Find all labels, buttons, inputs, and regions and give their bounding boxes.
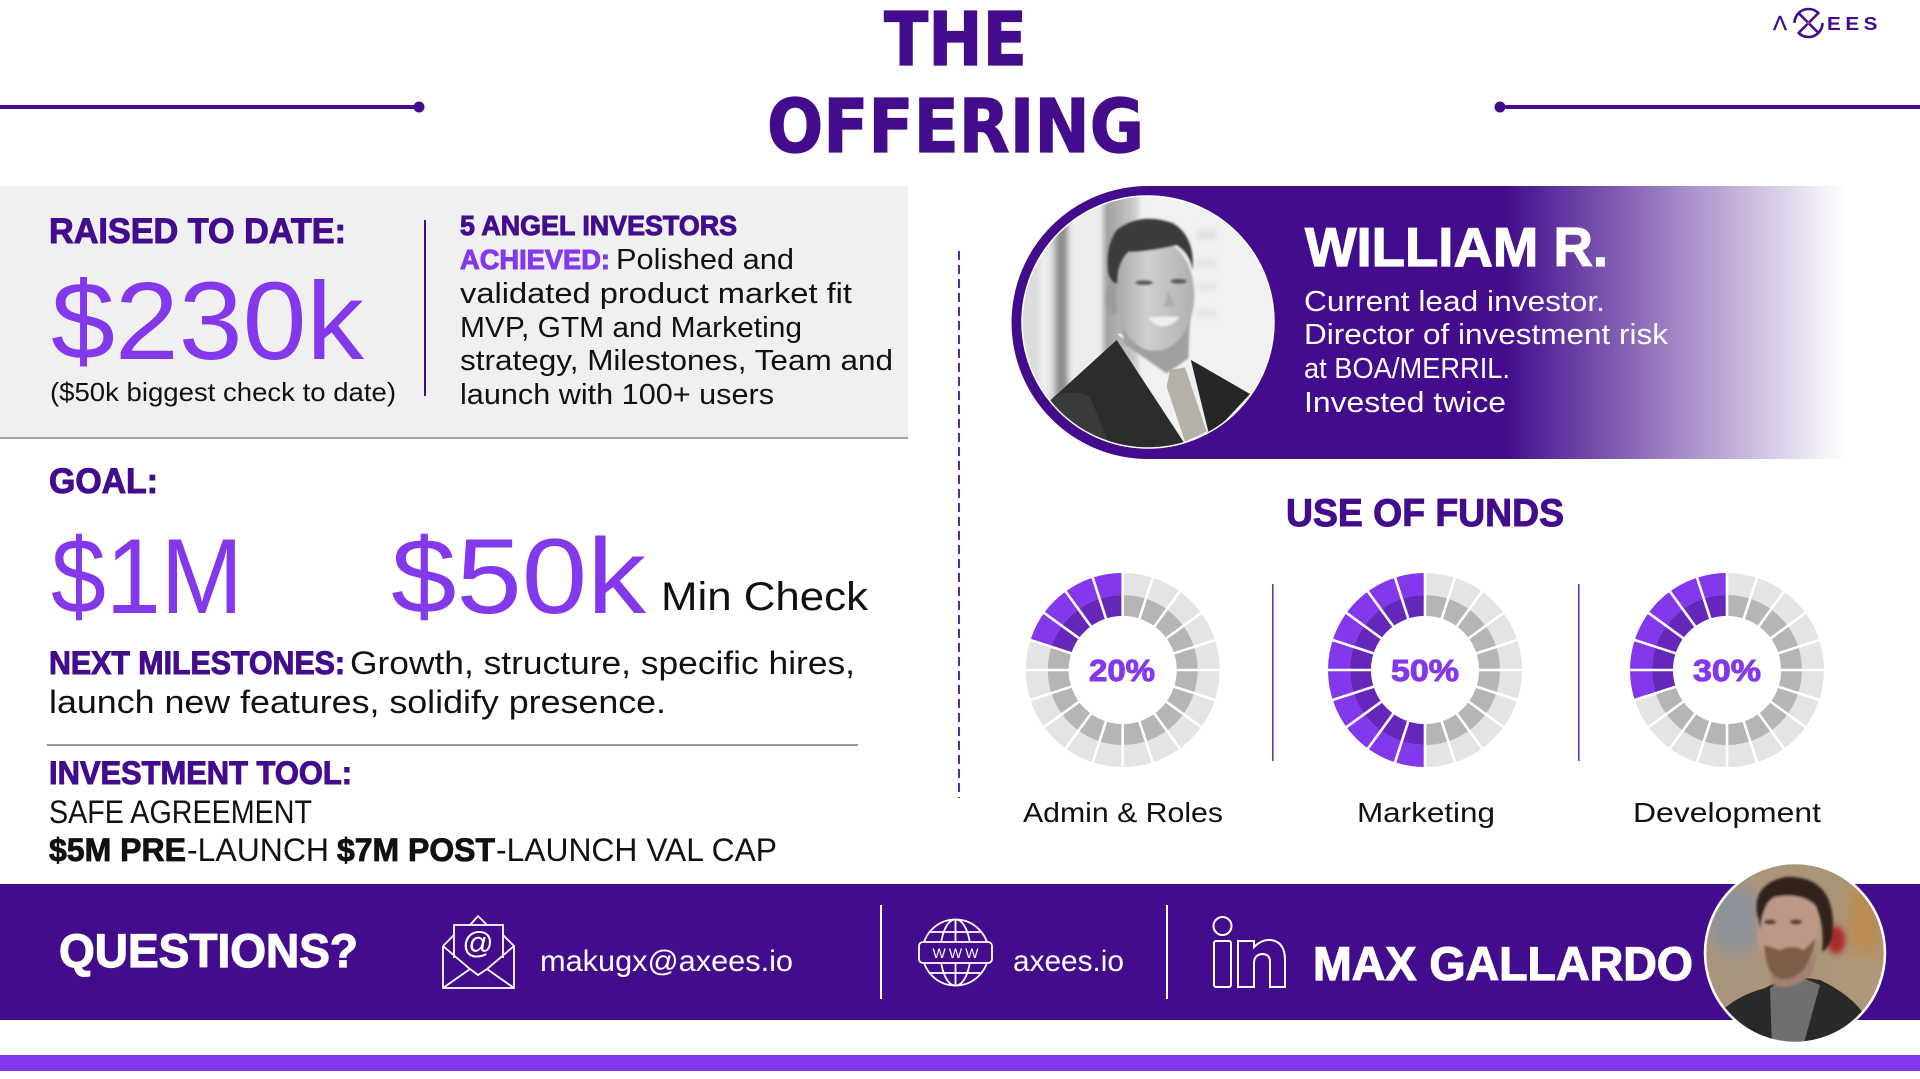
website: axees.io — [1013, 945, 1124, 978]
chart: development 30 percent — [1619, 562, 1835, 778]
text block: angel investors: ACHIEVED: — [460, 244, 610, 275]
text block: investment tool: INVESTMENT TOOL: — [49, 755, 352, 791]
title — [767, 0, 1144, 170]
title rule right — [1494, 102, 1920, 112]
chart: admin and roles 20 percent: 20% — [1089, 653, 1155, 688]
heading: questions: QUESTIONS? — [59, 924, 358, 977]
text block: next milestones — [49, 645, 855, 720]
text block: investment tool: $5M PRE — [49, 832, 186, 868]
text block: investor bio: Invested twice — [1304, 387, 1506, 419]
heading: goal: GOAL: — [49, 462, 158, 501]
minimum check label: Min Check — [661, 575, 869, 619]
photo: max portrait — [1700, 860, 1890, 1050]
text block: investor bio — [1304, 286, 1669, 419]
text block: angel investors — [460, 210, 893, 411]
label: admin and roles: Admin & Roles — [1023, 797, 1223, 828]
heading: use of funds: USE OF FUNDS — [1286, 492, 1564, 535]
text block: angel investors: 5 ANGEL INVESTORS — [460, 210, 737, 241]
panel: raised to date — [0, 186, 908, 439]
name: william r: WILLIAM R. — [1305, 216, 1608, 278]
chart: development 30 percent: 30% — [1693, 653, 1761, 688]
bottom accent bar — [0, 1055, 1920, 1071]
icon: logo x mark — [1794, 9, 1822, 37]
icon: globe: WWW — [932, 945, 979, 961]
text block: investor bio: Current lead investor. — [1304, 286, 1605, 318]
text block: investment tool: $7M POST — [337, 832, 495, 868]
label: development: Development — [1633, 797, 1821, 828]
chart: marketing 50 percent — [1325, 570, 1525, 770]
text block: investment tool: -LAUNCH — [187, 832, 329, 868]
text block: next milestones: NEXT MILESTONES: — [49, 645, 345, 681]
text block: investment tool: -LAUNCH VAL CAP — [496, 832, 777, 868]
text block: angel investors: Polished and — [616, 244, 794, 276]
photo: william portrait — [1022, 196, 1274, 448]
chart: marketing 50 percent: 50% — [1391, 653, 1459, 688]
text block: investment tool — [49, 755, 777, 868]
panel: contact footer — [0, 884, 1920, 1020]
icon: globe — [919, 919, 992, 986]
chart: admin and roles 20 percent — [1014, 562, 1231, 778]
heading: raised to date: RAISED TO DATE: — [49, 212, 346, 251]
icon: linkedin — [1214, 917, 1285, 987]
minimum check amount: $50k — [391, 516, 647, 636]
text block: angel investors: validated product market fit — [460, 278, 852, 310]
icon: email envelope — [443, 916, 514, 988]
title: OFFERING — [767, 84, 1144, 170]
logo: axees — [1773, 9, 1882, 37]
text block: angel investors: launch with 100+ users — [460, 379, 774, 411]
label: marketing: Marketing — [1357, 797, 1495, 828]
name: max gallardo: MAX GALLARDO — [1313, 937, 1693, 990]
text block: investor bio: Director of investment risk — [1304, 319, 1669, 351]
text block: next milestones: launch new features, solidify presence. — [49, 684, 666, 720]
logo: axees: Λ — [1773, 13, 1788, 35]
text block: angel investors: MVP, GTM and Marketing — [460, 312, 802, 344]
text block: next milestones: Growth, structure, specific hires, — [350, 645, 855, 681]
text block: angel investors: strategy, Milestones, Team and — [460, 345, 893, 377]
logo: axees: EES — [1827, 14, 1882, 34]
text block: investor bio: at BOA/MERRIL. — [1304, 353, 1510, 385]
icon: email envelope: @ — [462, 925, 494, 960]
panel: lead investor — [1012, 186, 1845, 470]
email address: makugx@axees.io — [540, 945, 793, 978]
biggest check note: ($50k biggest check to date) — [50, 377, 396, 407]
title rule left — [0, 102, 424, 112]
goal amount: $1M — [51, 516, 243, 636]
text block: investment tool: SAFE AGREEMENT — [49, 794, 312, 830]
amount raised: $230k — [51, 260, 365, 383]
